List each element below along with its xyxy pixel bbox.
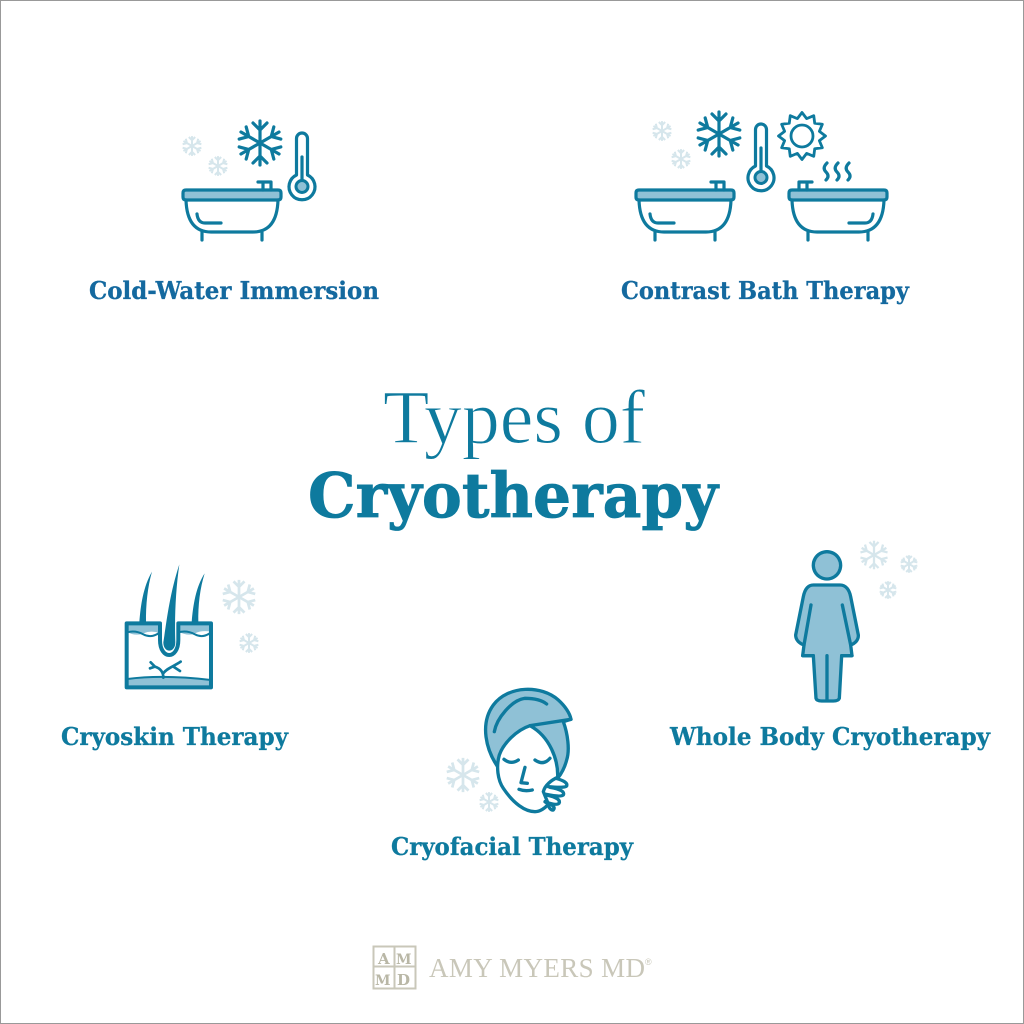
icon: cold bathtub xyxy=(636,182,734,240)
icon: cryofacial xyxy=(445,689,571,812)
towel xyxy=(486,689,571,778)
title line 1: Types of xyxy=(383,376,646,460)
logo mark: D xyxy=(397,971,410,989)
icon: pale snowflake xyxy=(239,633,259,653)
face xyxy=(498,726,558,812)
icon: sun xyxy=(778,112,826,160)
logo xyxy=(374,946,652,989)
icon: pale snowflake xyxy=(208,156,228,176)
icon: thermometer xyxy=(289,133,315,200)
title xyxy=(308,376,720,532)
icon: pale snowflake xyxy=(182,136,202,156)
logo wordmark: AMY MYERS MD xyxy=(429,953,645,983)
icon: pale snowflake xyxy=(900,555,918,573)
icon: cryoskin xyxy=(127,564,259,687)
label: cryoskin therapy: Cryoskin Therapy xyxy=(61,722,289,751)
icon: thermometer xyxy=(748,124,774,191)
icon: snowflake xyxy=(696,112,742,156)
towel fold xyxy=(494,698,571,732)
icon: pale snowflake xyxy=(479,792,499,812)
registered mark: ® xyxy=(645,957,652,967)
logo mark: M xyxy=(396,952,412,968)
icon: pale snowflake xyxy=(859,541,889,569)
icon: snowflake xyxy=(237,121,283,165)
icon: pale snowflake xyxy=(221,580,257,614)
label: cryofacial therapy: Cryofacial Therapy xyxy=(391,832,634,861)
icon: pale snowflake xyxy=(652,121,672,141)
icon: steam xyxy=(824,163,850,180)
logo mark: A xyxy=(377,950,390,968)
icon: pale snowflake xyxy=(879,581,897,599)
label: contrast bath therapy: Contrast Bath Therapy xyxy=(621,276,910,305)
logo mark xyxy=(374,946,416,989)
body xyxy=(796,552,858,701)
skin block xyxy=(127,564,211,687)
label: cold-water immersion: Cold-Water Immersion xyxy=(89,276,379,305)
eyes, nose, mouth xyxy=(504,758,550,791)
limbs xyxy=(803,605,852,700)
icon: pale snowflake xyxy=(671,149,691,169)
hand xyxy=(545,778,567,810)
logo mark: M xyxy=(375,973,390,989)
title line 2: Cryotherapy xyxy=(308,459,720,532)
icon: contrast bath xyxy=(636,112,887,240)
icon: pale snowflake xyxy=(445,758,481,792)
icon: whole body xyxy=(796,541,918,701)
icon: cold-water immersion xyxy=(182,121,315,240)
icon: hot bathtub xyxy=(789,182,887,240)
label: whole body cryotherapy: Whole Body Cryotherapy xyxy=(669,722,991,751)
icon: bathtub xyxy=(183,182,281,240)
